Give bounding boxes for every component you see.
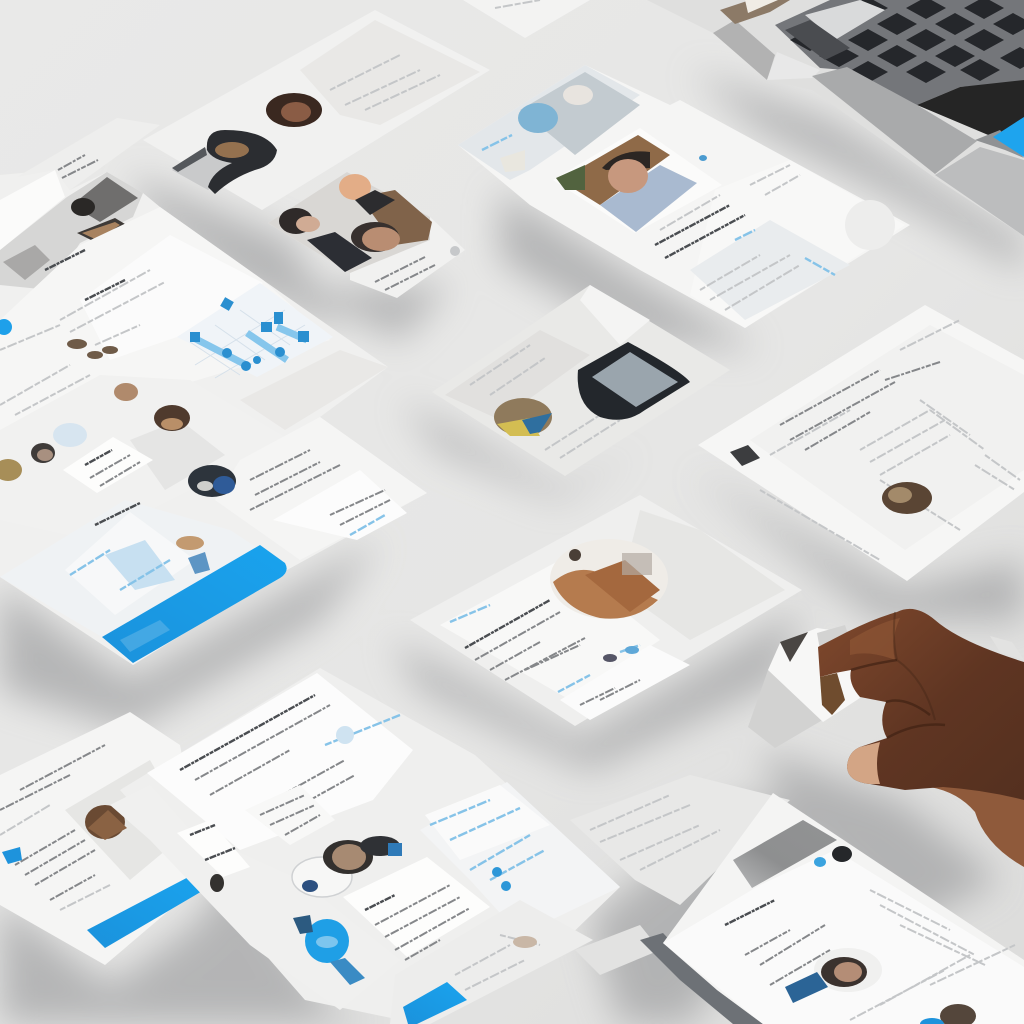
dark touch surface (917, 80, 1024, 137)
palm (930, 760, 1024, 867)
icon: small dark thumbnail (730, 445, 760, 466)
panel: left cluster of layered papers (0, 118, 427, 665)
folded paper top (0, 170, 65, 250)
panel: top paper with portraits (143, 10, 490, 210)
panel: top-centre paper with portrait (458, 65, 910, 328)
small ornaments (67, 339, 118, 359)
panel: middle paper with monitor (432, 285, 730, 476)
icon: blue circle (305, 919, 349, 963)
index finger highlight (850, 618, 900, 660)
panel: bottom-right paper (640, 793, 1024, 1024)
fingers and back of hand (818, 609, 1024, 800)
panel: faded sheet behind bottom right (570, 775, 790, 975)
paper and strap on laptop (720, 0, 790, 24)
panel: folded paper held by hand (748, 625, 1024, 748)
panel: photo card (268, 172, 465, 298)
panel: bottom-centre layered paper (110, 668, 620, 1024)
right sheet (420, 782, 620, 935)
blue corner (993, 117, 1024, 157)
image strip (0, 172, 143, 290)
icon: dark blue circle (188, 465, 236, 497)
panel: right paper (698, 305, 1024, 581)
panel: bottom-left paper (0, 712, 205, 965)
laptop: top right (647, 0, 1024, 236)
panel: centre-lower paper with room photo (410, 495, 802, 726)
blue button (403, 982, 467, 1024)
white card (343, 857, 490, 957)
thumb nail (847, 742, 880, 784)
stacked lower sheet (110, 785, 400, 1010)
lower fade sheet (390, 900, 593, 1024)
photo thumbnails (814, 948, 882, 992)
lower right sheet (215, 417, 427, 560)
upper strip behind fold (17, 118, 160, 190)
blue footer band (102, 545, 287, 663)
circle thumbnails (292, 857, 352, 897)
small paper: top edge (463, 0, 590, 38)
icon: blue and yellow circle (494, 398, 552, 436)
photo: young man (553, 128, 722, 233)
silver palm rest (812, 67, 977, 174)
icon: person silhouette (172, 130, 277, 194)
blue footer band (87, 872, 204, 948)
icon: blue tab (330, 958, 365, 985)
icon: brown circle (882, 482, 932, 514)
photo: room interior (550, 539, 668, 619)
middle sheet (0, 375, 290, 540)
keyboard (775, 0, 1024, 105)
hand holding paper (818, 609, 1024, 867)
upper sheet (0, 207, 330, 440)
lower image sheet (0, 500, 287, 665)
icon: portrait circle (266, 93, 322, 127)
icon: dark circle with monitor (578, 342, 690, 420)
finger creases (851, 660, 945, 738)
chart panel (177, 283, 333, 378)
